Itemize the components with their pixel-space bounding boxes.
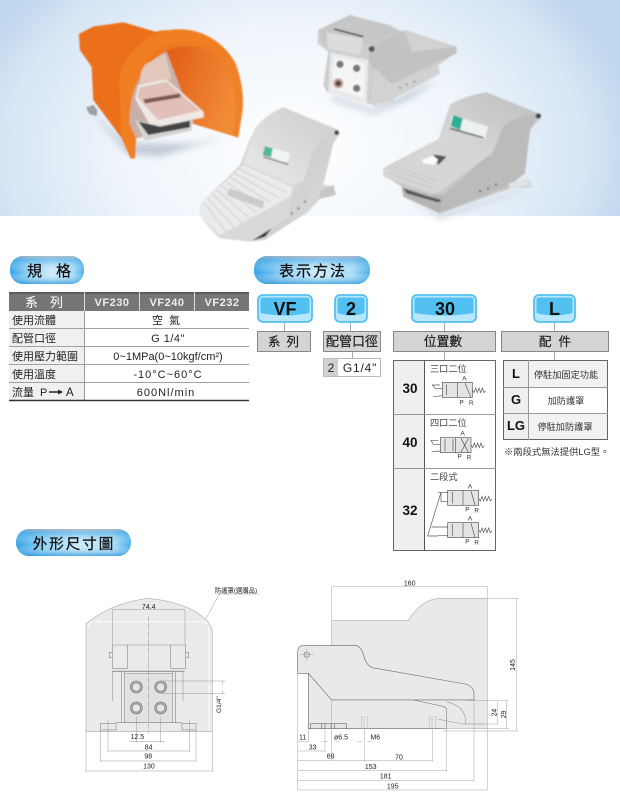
table rows: -10°C~60°C [133,369,203,381]
heading: 表示方法 [254,256,370,284]
accessories table: L [512,366,520,381]
photo: switch pedal [383,92,542,218]
table header: VF230 [95,297,129,309]
drawing: front view [86,585,259,772]
table rows: G 1/4" [151,333,185,345]
photo: front pedal [199,107,339,242]
photo: orange guard pedal [79,22,243,158]
table rows: A [66,387,74,399]
hero banner background [0,0,620,216]
table rows [9,311,249,400]
position table: 30 [402,381,418,396]
table rows: 配管口徑 [12,331,56,345]
table rows: 空氣 [152,313,186,327]
label: 配管口徑: 配管口徑 [326,334,378,349]
label: 系列: 系列 [268,335,305,349]
table rows: 600Nl/min [137,387,195,399]
dimension labels: 33 [309,744,317,751]
note: ※兩段式無法提供LG型。 [504,446,609,457]
table rows: 流量 [12,385,34,399]
heading: 外形尺寸圖 [16,529,131,556]
valve symbol: 32: A [468,516,473,523]
specification table [9,292,249,400]
table rows: 使用壓力範圍 [12,349,78,363]
table header: VF240 [150,297,184,309]
code box: 30 [412,295,476,322]
table rows: P [40,387,47,399]
valve symbol: 30: R [469,400,474,407]
code box: 30: 30 [435,299,455,319]
dimension labels: 153 [365,764,377,771]
heading: 規格 [10,256,85,284]
heading: 表示方法: 表示方法 [279,263,347,280]
code box: 2: 2 [346,299,356,319]
dimension labels: 11 [299,734,306,741]
port size option: G1/4" [343,361,377,375]
table rows: 使用溫度 [12,367,56,381]
label: 系列 [258,332,310,352]
dimension labels [299,580,517,790]
valve symbol: 40 [431,431,484,461]
dimension labels: 160 [404,580,416,587]
dimension labels: 24 [491,709,498,717]
dimension labels: 130 [143,764,155,771]
position table: 32 [402,503,418,518]
dimension labels: 防護罩(選購品) [215,585,257,594]
label: 位置數 [394,332,496,352]
accessories table: 停駐加固定功能 [534,369,598,380]
code box: VF [258,295,312,322]
position table: 三口二位 [430,363,467,374]
valve symbol: 40: R [467,454,472,461]
valve symbol: 40: A [460,431,465,438]
photo: rear view pedal [317,15,457,113]
dimension labels: ø6.5 [334,734,348,741]
label: 位置數: 位置數 [424,334,462,349]
dimension labels: 145 [510,659,517,671]
dimension labels: 84 [145,744,153,751]
dimension labels: 29 [501,710,508,718]
code box: L [534,295,575,322]
dimension labels: M6 [370,734,380,741]
table header: VF232 [205,297,239,309]
valve symbol: 30: A [462,376,467,383]
valve symbol: 30: P [460,399,464,406]
connector lines [284,322,554,360]
valve symbol: 32: P [465,506,469,513]
pedal outline [298,645,485,729]
heading: 外形尺寸圖: 外形尺寸圖 [33,536,115,553]
code box: 2 [335,295,367,322]
valve symbol: 30 [432,376,486,407]
table header [9,292,249,311]
drawing: side view [298,580,518,790]
dimension labels: 195 [387,783,399,790]
dimension lines [298,587,518,790]
guard outline [86,598,212,732]
position table: 四口二位 [430,417,467,428]
code box: VF: VF [273,299,297,319]
label: 配件 [502,332,608,352]
dimension lines [86,594,259,772]
dimension labels: 98 [144,754,152,761]
accessories table: 加防護罩 [548,395,584,406]
position table: 二段式 [430,471,458,482]
heading: 規格: 規格 [27,263,85,280]
valve body [101,617,196,733]
accessories table [503,360,608,440]
position table: 40 [402,435,418,450]
dimension labels: 70 [395,754,403,761]
accessories table: 停駐加防護罩 [537,421,593,432]
accessories table: G [511,392,521,407]
valve symbol: 32: R [474,540,479,547]
table rows: 0~1MPa(0~10kgf/cm²) [113,351,223,363]
position table [393,360,496,551]
dimension labels: 69 [327,754,335,761]
dimension labels: G1/4" [216,696,223,713]
dimension labels: 181 [380,774,392,781]
valve symbol: 40: P [458,454,462,461]
port size option: 2 [328,361,335,375]
accessories table: LG [507,418,525,433]
valve symbol: 32: A [468,484,473,491]
table rows: 使用流體 [12,313,56,327]
dimension labels: 74.4 [142,604,156,611]
housing silhouette [298,598,487,729]
valve symbol: 32: R [474,508,479,515]
dimension labels: 12.5 [131,734,144,741]
valve symbol: 32: P [465,538,469,545]
code box: L: L [549,299,560,319]
label: 配件: 配件 [539,335,578,349]
dimension labels [131,585,257,771]
table header: 系列 [25,295,75,310]
port size option [324,358,380,376]
valve symbol: 32 [428,484,492,547]
label: 配管口徑 [324,332,380,352]
